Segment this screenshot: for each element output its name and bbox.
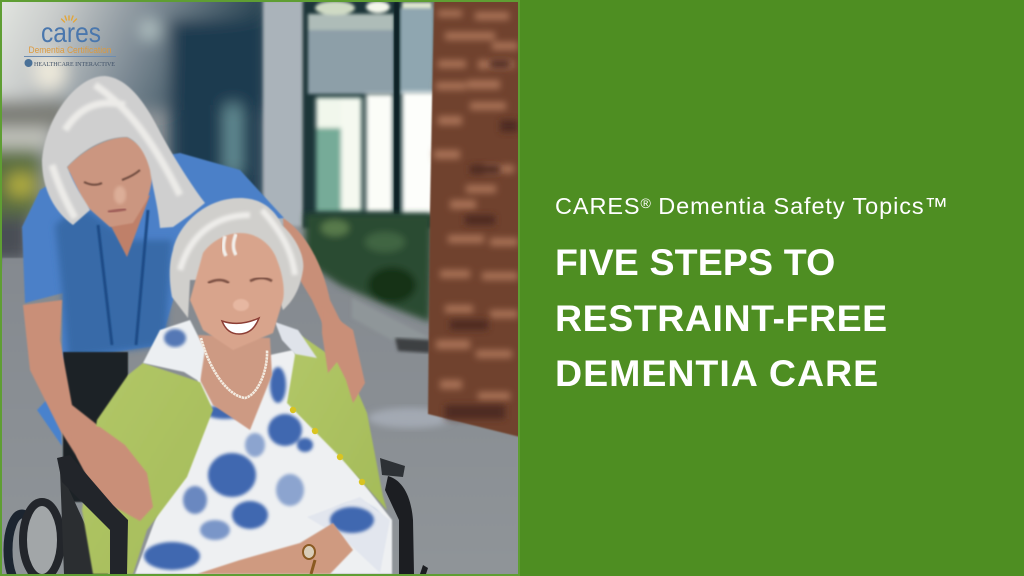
caregiver hand on cardigan — [76, 426, 154, 522]
hair — [170, 198, 303, 318]
icon: sunburst — [62, 16, 76, 22]
hedge — [305, 214, 432, 322]
buttons — [290, 407, 365, 485]
face — [190, 233, 284, 350]
caregiver upper arm — [22, 299, 97, 476]
chest and neck — [198, 335, 272, 430]
border around photo — [1, 1, 519, 575]
eyes and smile — [208, 278, 272, 283]
wheelchair armrest — [57, 455, 128, 574]
heading: RESTRAINT-FREE — [555, 296, 888, 338]
forearm and clasped hands — [197, 523, 353, 574]
caregiver — [22, 76, 345, 521]
logo: CARES Dementia Certification: HEALTHCARE INTERACTIVE — [34, 61, 115, 68]
resident — [57, 198, 392, 574]
cardigan right — [287, 330, 387, 510]
lanyard — [98, 210, 148, 345]
cardigan left — [82, 363, 213, 574]
heading — [555, 241, 888, 394]
logo: CARES Dementia Certification — [24, 16, 116, 68]
scrub top — [22, 153, 284, 360]
caregiver back arm — [282, 218, 342, 324]
face — [67, 137, 153, 227]
brick wall — [428, 0, 520, 437]
floral print — [144, 367, 380, 570]
collars — [143, 320, 205, 382]
neck — [110, 194, 150, 258]
heading: FIVE STEPS TO — [555, 241, 836, 283]
wristwatch — [303, 545, 315, 574]
necklace — [201, 338, 267, 398]
subtitle: CARES® Dementia Safety Topics™ — [555, 193, 949, 219]
panel: photograph of caregiver and resident — [0, 0, 520, 576]
planter kerb — [353, 300, 424, 338]
upper windows — [308, 1, 434, 94]
pillar and dark facade — [263, 0, 303, 226]
bright lower windows — [316, 92, 436, 214]
dark trousers — [63, 352, 128, 502]
caregiver hand on shoulder — [322, 308, 365, 403]
right sleeve — [307, 497, 390, 573]
logo: CARES Dementia Certification: cares — [41, 17, 101, 48]
logo: CARES Dementia Certification: Dementia Certification — [28, 45, 112, 56]
blouse — [135, 350, 392, 574]
hair — [42, 76, 205, 228]
heading: DEMENTIA CARE — [555, 352, 879, 394]
ground — [2, 258, 423, 324]
wheelchair — [8, 458, 428, 576]
background: street scene — [0, 0, 520, 576]
